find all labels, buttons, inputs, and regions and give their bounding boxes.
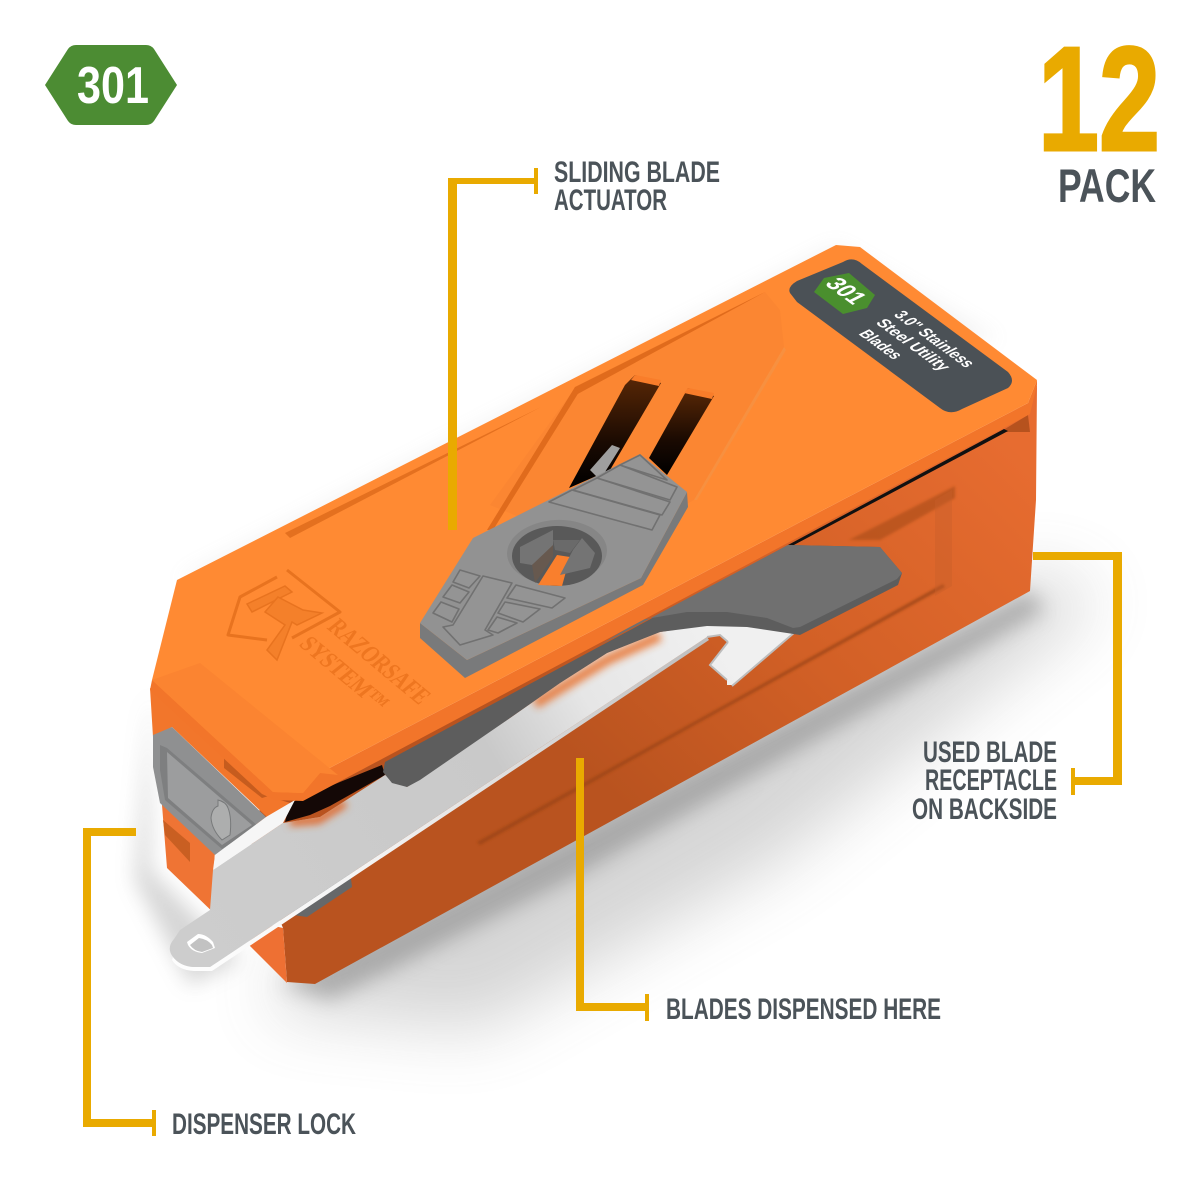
blade carrier — [383, 545, 902, 787]
label: used blade receptacle — [912, 736, 1057, 826]
label text: Blades — [854, 327, 907, 362]
label: sliding blade actuator: SLIDING BLADE — [554, 156, 720, 189]
top face bevels and recess — [152, 292, 786, 793]
label: dispenser lock: DISPENSER LOCK — [172, 1108, 356, 1141]
dispenser lock — [153, 727, 266, 855]
actuator grip ridges — [549, 455, 677, 530]
label: sliding blade actuator — [554, 156, 720, 217]
pack count — [1038, 17, 1160, 212]
upper end face — [150, 688, 300, 818]
pack count: 12 — [1038, 17, 1160, 182]
actuator arrow markings — [433, 570, 565, 645]
body grooves — [477, 415, 1030, 845]
label text — [854, 308, 979, 373]
slots — [569, 375, 714, 488]
callout: dispenser lock — [83, 828, 156, 1136]
actuator — [420, 454, 688, 678]
label: blades dispensed here: BLADES DISPENSED HERE — [666, 993, 941, 1026]
callout: used blade receptacle — [1033, 552, 1122, 795]
badge: 301: 301 — [77, 57, 149, 115]
label: sliding blade actuator: ACTUATOR — [554, 184, 667, 217]
label: used blade receptacle: RECEPTACLE — [925, 764, 1057, 797]
callout: sliding blade actuator — [448, 168, 538, 530]
pack count: PACK — [1058, 159, 1156, 212]
product label — [789, 259, 1012, 412]
body front face — [250, 385, 1037, 984]
label: used blade receptacle: USED BLADE — [923, 736, 1057, 769]
logo: RazorSafe System: RAZORSAFE — [321, 614, 437, 709]
logo: RazorSafe System: SYSTEM™ — [293, 632, 394, 715]
product: blade dispenser — [150, 168, 1037, 984]
top lip — [150, 380, 1037, 801]
blade hole — [187, 934, 215, 953]
logo: RazorSafe System — [228, 570, 437, 715]
badge: 301 — [45, 45, 177, 125]
label text: 3.0" Stainless — [889, 308, 979, 370]
lower end face — [158, 785, 287, 983]
label text: Steel Utility — [871, 316, 955, 373]
actuator ring — [505, 517, 609, 587]
top face — [152, 245, 1037, 793]
label: used blade receptacle: ON BACKSIDE — [912, 793, 1057, 826]
black gap under lip — [788, 429, 1008, 546]
dark lower carrier tip — [290, 870, 352, 917]
label badge: 301 — [819, 274, 873, 308]
callout: blades dispensed — [576, 758, 649, 1021]
blade — [170, 625, 795, 971]
background shadow — [135, 245, 1100, 1030]
